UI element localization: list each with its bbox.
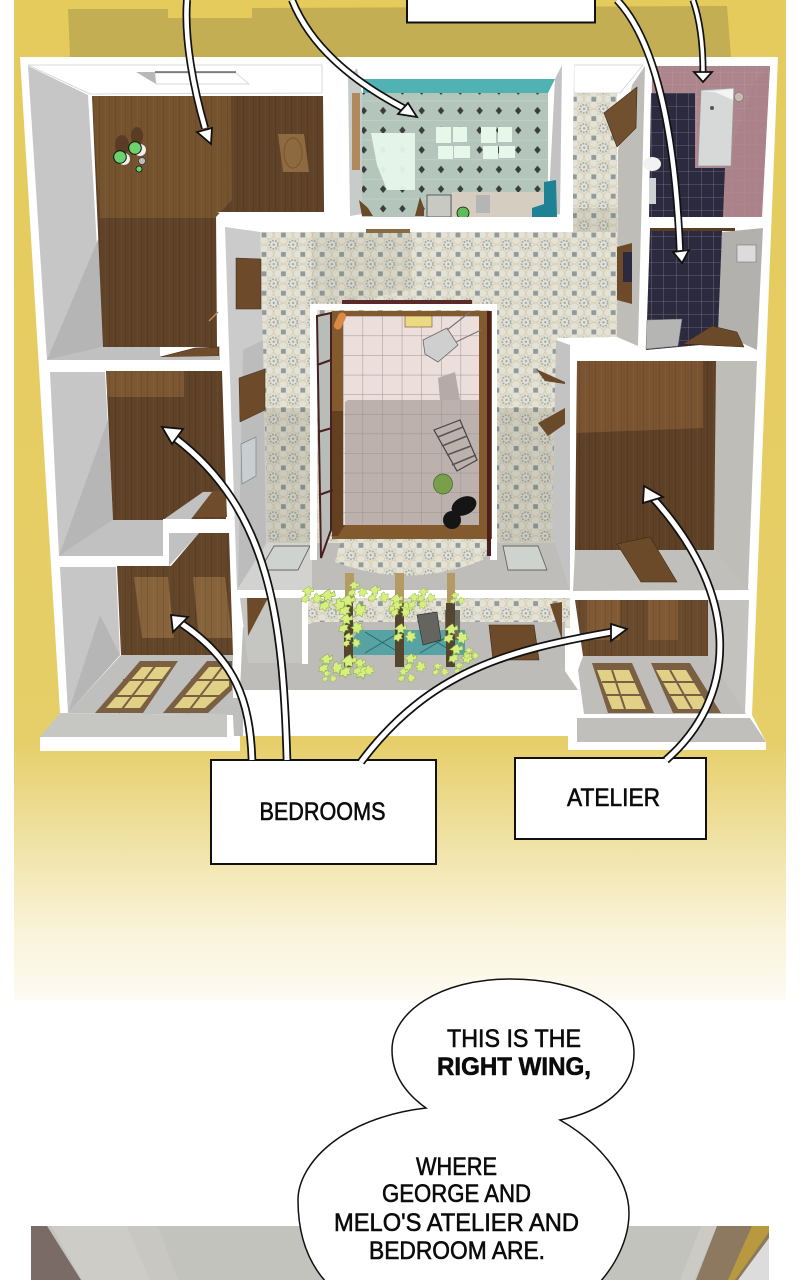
floor [575,361,716,550]
top label box [407,0,595,22]
skylight [136,72,249,84]
yellow background panel [14,0,786,1000]
sink [646,319,682,349]
room: atelier [575,600,766,742]
climbing vines [301,581,479,683]
wall fixture [737,245,756,262]
teal rug [344,630,465,655]
navy floor [646,230,722,350]
porch left shutter [247,598,268,636]
room: bathroom lower [646,228,763,350]
window 2 [163,661,232,713]
bubble text: lower: MELO'S ATELIER AND [334,1209,579,1237]
green plant pot [434,474,452,494]
room: lower-left bedroom [40,533,243,737]
arrow: to lower-left bedroom [171,615,252,760]
navy floor tiles [649,93,725,217]
wall [60,567,120,713]
hall left wall [225,227,268,590]
wall [50,372,113,556]
arrow: to lower bathroom [617,0,689,263]
room: central tiled hall [217,65,645,593]
porch tile wall [245,598,570,628]
bubble text: lower: WHERE [416,1153,497,1181]
label box: atelier [515,758,706,839]
black bags [443,492,480,529]
label box: bedrooms [211,760,436,864]
corridor upper wall [574,65,643,93]
corridor shutter [604,87,637,147]
porch right shutter [550,602,562,640]
hall tile floor [258,93,618,543]
hall shadows [264,408,312,543]
ledge [577,718,766,742]
floor [106,371,226,520]
bubble text: lower: BEDROOM ARE. [369,1237,545,1265]
arrow: to top-left bedroom [186,0,212,144]
bubble text: lower: GEORGE AND [382,1180,531,1208]
green stools [114,127,146,172]
lower floor [68,655,233,715]
ground shadow behind the house [68,6,731,57]
arrow: to upper bathroom [693,0,712,82]
house floor plan [20,57,778,751]
kitchen teal wall [363,79,555,93]
courtyard right dark frame [487,311,491,556]
orange bolster [333,311,347,331]
kitchen side walls [348,68,362,216]
courtyard tile floor [343,316,479,525]
bubble text: upper: THIS IS THE [447,1025,581,1053]
back wall edge [28,65,322,94]
folding chair [434,420,477,471]
porch band wall [237,590,570,598]
grey armchair [423,312,481,362]
rug [278,134,309,172]
porch floor [240,622,578,690]
courtyard left french door [317,313,331,558]
courtyard white frame [310,304,497,560]
floor [117,533,233,655]
room: kitchen [348,65,562,219]
white wall mass [20,57,778,751]
bubble text: lower [334,1153,579,1265]
door in floor [186,491,227,517]
arrow: to middle-left bedroom [162,427,287,760]
arrow: to atelier room [361,624,627,762]
grey cushions [417,612,441,645]
label box: bedrooms: BEDROOMS [260,798,386,826]
door [683,326,744,347]
floor [575,600,708,656]
hall shutter lower [239,369,265,422]
room: top-left bedroom [28,65,324,360]
kitchen front wall [217,212,573,232]
bubble text: upper: RIGHT WING, [437,1053,591,1081]
porch door [489,625,539,660]
hall floor windows [260,546,310,570]
left ledge [40,713,227,737]
window 1 [95,661,178,713]
arrow: to kitchen [292,0,417,117]
bedroom lower floor strip [47,347,220,360]
kitchen floor [362,93,548,217]
corridor window [617,243,632,304]
hall left window [241,437,256,484]
room: middle-left bedroom [50,371,230,565]
hall shutter upper [236,258,261,309]
hall right shutters [536,369,565,384]
room: bathroom upper [643,66,770,217]
room: right bedroom [573,361,757,591]
arrow: to right bedroom [643,486,720,760]
courtyard wooden frame [332,311,492,539]
wall and lower floor [708,600,749,714]
grey wall [718,228,763,350]
pink wall tiles [651,66,770,217]
porch and pergola [237,573,578,690]
yellow mat [405,316,432,327]
label box: atelier: ATELIER [567,784,660,812]
patio floor [237,543,570,592]
hall lower right wall stub [552,340,570,593]
window 1 [592,663,654,713]
window 2 [651,663,721,713]
lower floor [573,550,749,591]
door [617,537,677,582]
bottom panel: interior scene [31,1226,769,1280]
chair shadow [438,372,460,400]
bathtub [698,88,734,166]
bedroom left wall [28,66,103,360]
kitchen window light [371,127,515,190]
toilet [643,157,661,171]
courtyard [310,300,497,560]
lower floor with notch [59,520,163,556]
pergola posts [344,573,455,667]
bedroom floor [92,96,324,347]
bedroom door [160,347,219,357]
corridor right wall [617,66,645,346]
bubble text: upper [437,1025,591,1081]
kitchen counter and appliances [359,180,557,219]
speech bubble [298,979,634,1280]
right wall [714,361,757,590]
